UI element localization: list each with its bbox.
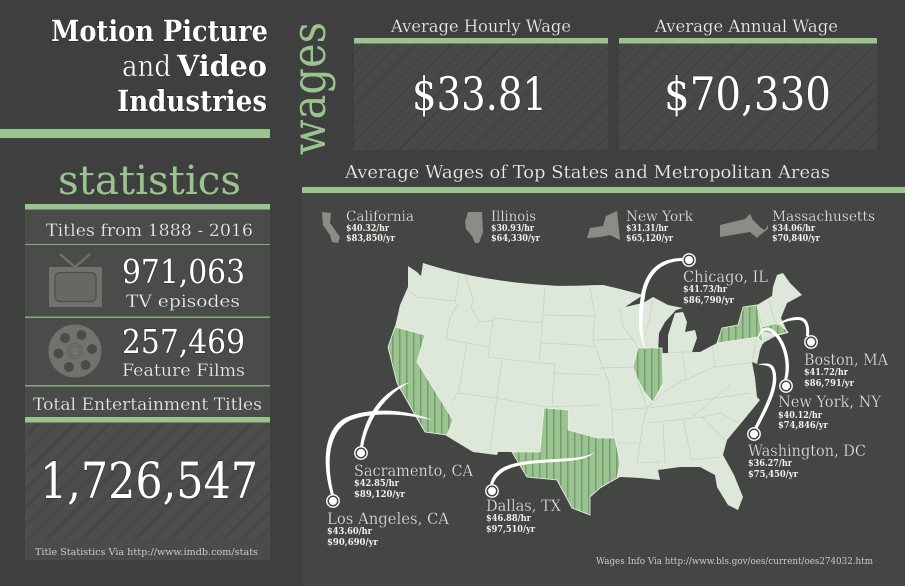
callout: New York: $74,846/yr — [778, 421, 828, 431]
callout: Sacramento — [354, 382, 474, 500]
title: Industries — [117, 84, 267, 118]
callout: Dallas: $46.88/hr — [486, 514, 531, 524]
titles range heading: Titles from 1888 - 2016 — [46, 221, 253, 241]
icon: television — [49, 254, 102, 307]
callout: New York — [757, 328, 882, 431]
map: United States — [388, 263, 802, 515]
panel: average hourly wage: Average Hourly Wage — [390, 17, 571, 36]
callout: Washington: $75,450/yr — [748, 470, 798, 480]
state: New York: $31.31/hr — [626, 224, 668, 234]
callout: Dallas — [486, 452, 595, 535]
panel: average hourly wage — [354, 17, 608, 150]
callout: Washington: Washington, DC — [748, 442, 866, 460]
callout: Sacramento: $89,120/yr — [354, 490, 405, 500]
panel: average annual wage: $70,330 — [664, 67, 831, 121]
panel: statistics — [25, 158, 270, 560]
title underline bar — [0, 129, 270, 138]
state: Illinois: Illinois — [491, 209, 536, 225]
icon: Massachusetts — [720, 214, 768, 238]
callout: Chicago: $86,790/yr — [683, 296, 734, 306]
panel: average annual wage: Average Annual Wage — [654, 17, 838, 36]
title: Video — [176, 49, 267, 83]
statistics heading: statistics — [58, 158, 241, 204]
state: New York: $65,120/yr — [626, 234, 673, 244]
callout: Washington: $36.27/hr — [748, 459, 792, 469]
state: California: California — [346, 209, 414, 225]
highlighted state: New York — [717, 305, 763, 343]
callout: Chicago: $41.73/hr — [683, 285, 727, 295]
icon: Illinois — [465, 212, 483, 243]
state: Massachusetts: Massachusetts — [772, 209, 875, 225]
TV episodes stat: 971,063 — [122, 252, 245, 291]
state: Massachusetts: $34.06/hr — [772, 224, 815, 234]
state: Illinois: $64,330/yr — [491, 234, 540, 244]
title: Motion Picture — [51, 14, 268, 48]
state: Illinois — [465, 209, 540, 244]
icon: California — [322, 212, 340, 243]
feature films stat — [122, 322, 245, 381]
title: and — [122, 49, 171, 83]
panel: average hourly wage: $33.81 — [412, 67, 547, 121]
panel: map area — [302, 192, 905, 586]
feature films stat: Feature Films — [122, 361, 245, 381]
icon: film reel — [48, 324, 102, 378]
callout: Sacramento: Sacramento, CA — [354, 462, 474, 480]
wages heading: wages — [282, 22, 337, 155]
callout: Dallas: $97,510/yr — [486, 525, 535, 535]
icon: New York — [587, 211, 620, 240]
feature films stat: 257,469 — [122, 322, 245, 361]
callout: Sacramento: $42.85/hr — [354, 479, 399, 489]
total titles number: 1,726,547 — [40, 452, 258, 510]
wages source: Wages Info Via http://www.bls.gov/oes/current/oes274032.htm — [596, 556, 873, 567]
highlighted state: Illinois — [633, 348, 663, 402]
title statistics source: Title Statistics Via http://www.imdb.com/stats — [35, 547, 258, 558]
callout: Los Angeles: $90,690/yr — [327, 538, 378, 548]
callout: New York: $40.12/hr — [778, 411, 822, 421]
TV episodes stat — [122, 252, 245, 312]
callout: Dallas: Dallas, TX — [486, 497, 561, 515]
state: California: $40.32/hr — [346, 224, 389, 234]
state: Massachusetts: $70,840/yr — [772, 234, 820, 244]
panel: average annual wage — [619, 17, 877, 150]
callout: Boston: Boston, MA — [804, 351, 889, 369]
state: California: $83,850/yr — [346, 234, 395, 244]
title — [51, 14, 268, 118]
total titles box — [25, 422, 270, 540]
callout: Los Angeles — [326, 411, 450, 548]
callout: New York: New York, NY — [778, 393, 882, 411]
state: Illinois: $30.93/hr — [491, 224, 534, 234]
statistics panel background — [25, 209, 270, 560]
highlighted state: Texas — [512, 408, 620, 515]
callout: Boston — [776, 317, 889, 389]
callout: Washington — [748, 364, 866, 480]
callout: Los Angeles: $43.60/hr — [327, 527, 372, 537]
callout: Chicago: Chicago, IL — [683, 268, 768, 286]
statistics heading bar — [25, 204, 270, 210]
callout: Chicago — [639, 254, 768, 350]
highlighted state: Massachusetts — [762, 323, 788, 335]
state: California — [322, 209, 414, 244]
TV episodes stat: TV episodes — [126, 292, 240, 312]
state: New York: New York — [626, 209, 693, 225]
callout: Boston: $41.72/hr — [804, 368, 848, 378]
state: Massachusetts — [720, 209, 875, 244]
total titles heading: Total Entertainment Titles — [33, 395, 262, 415]
top states heading: Average Wages of Top States and Metropolitan Areas — [344, 162, 830, 183]
callout: Los Angeles: Los Angeles, CA — [327, 510, 450, 528]
state border lines — [408, 273, 778, 465]
state: New York — [587, 209, 693, 244]
callout: Boston: $86,791/yr — [804, 379, 854, 389]
highlighted state: California — [388, 327, 453, 435]
